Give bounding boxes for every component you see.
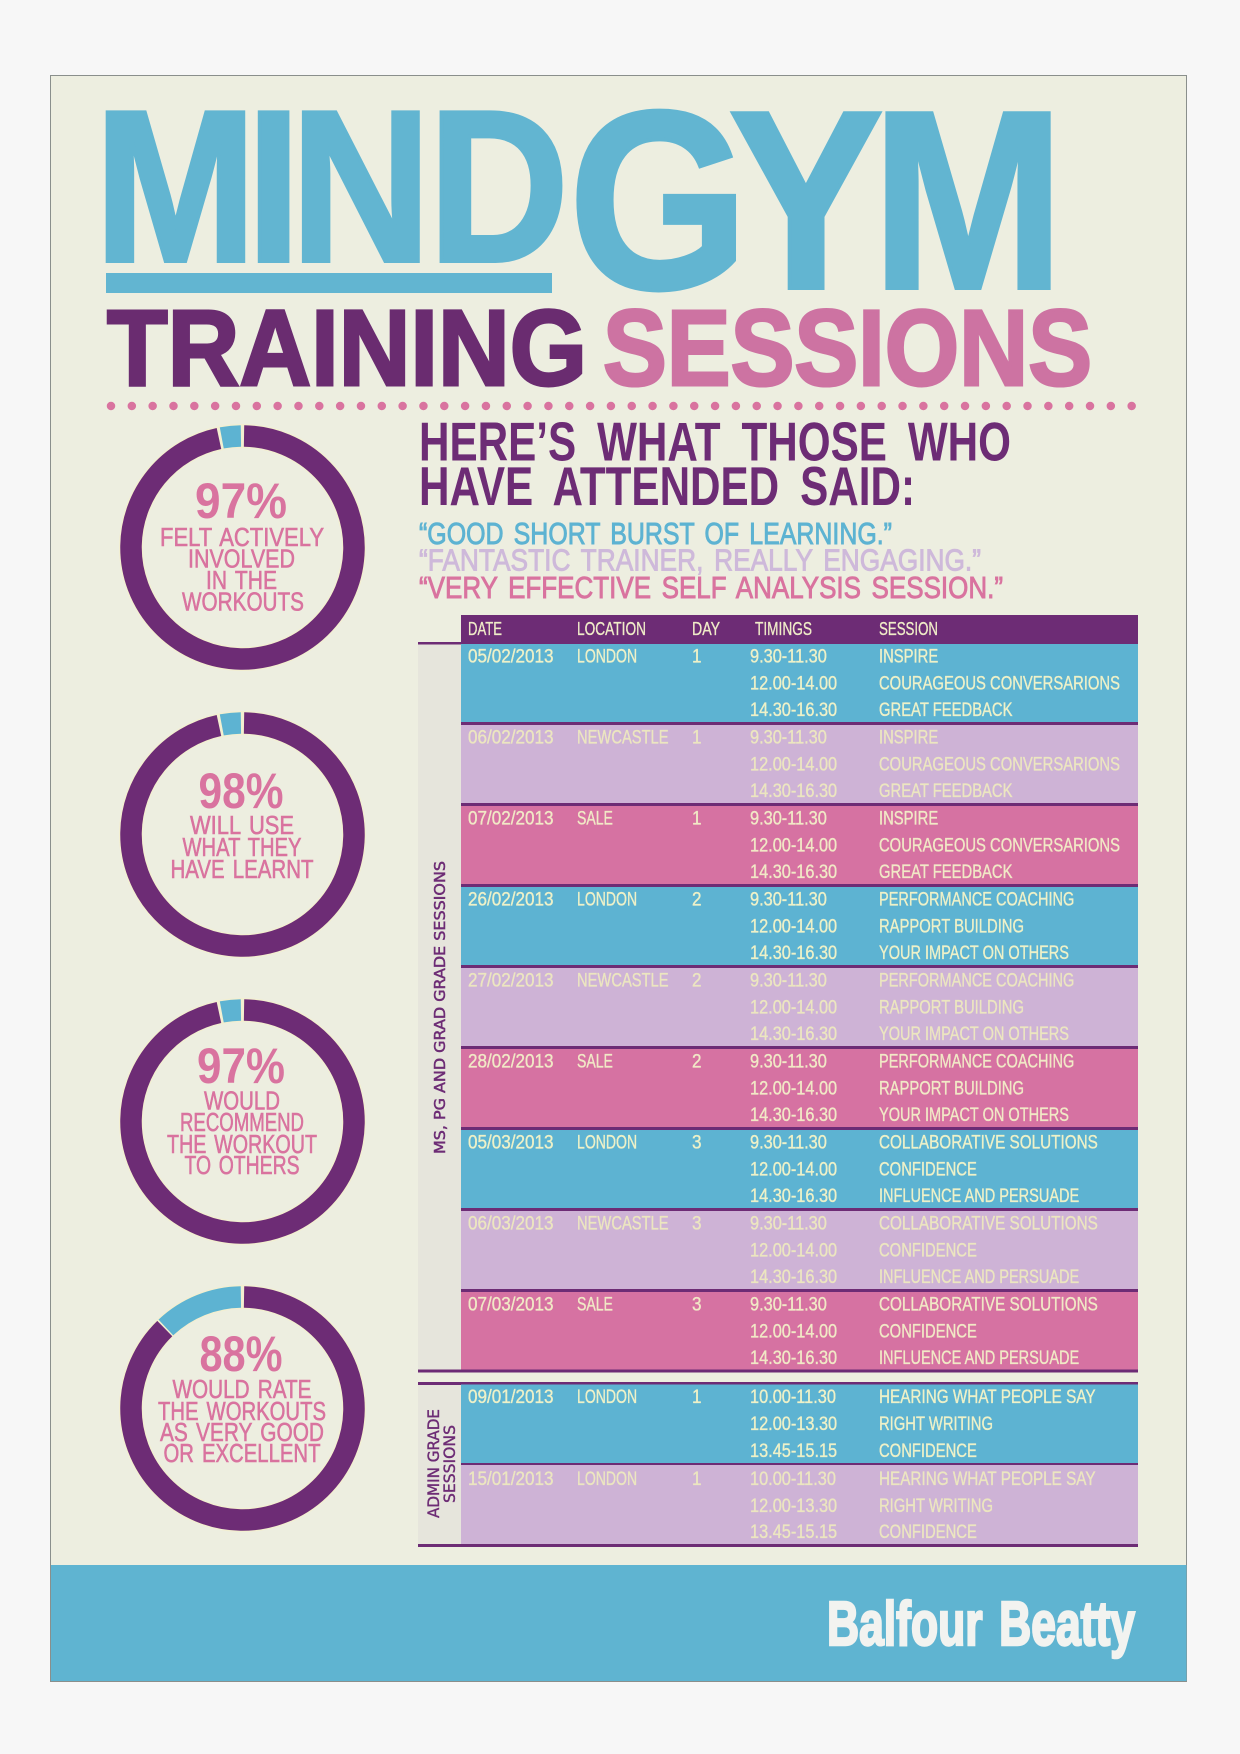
row: 27/02/2013 Newcastle: 2 bbox=[692, 970, 702, 991]
row: 05/02/2013 London: 1 bbox=[692, 646, 702, 667]
row: 09/01/2013 London: 13.45-15.15 bbox=[750, 1440, 837, 1461]
row: 28/02/2013 Sale: 12.00-14.00 bbox=[750, 1077, 837, 1099]
row: 06/03/2013 Newcastle: 3 bbox=[692, 1213, 702, 1234]
row: 06/02/2013 Newcastle: 06/02/2013 bbox=[468, 727, 554, 748]
row: 15/01/2013 London: 12.00-13.30 bbox=[750, 1495, 837, 1516]
donut: 97% felt actively involved: FELT ACTIVELY bbox=[160, 522, 324, 552]
side strip: MS, PG and Grad grade sessions: MS, PG AND GRAD GRADE SESSIONS bbox=[431, 861, 449, 1154]
row: 15/01/2013 London bbox=[461, 1465, 1138, 1544]
row: 28/02/2013 Sale: PERFORMANCE COACHING bbox=[879, 1051, 1074, 1072]
row: 07/02/2013 Sale bbox=[461, 806, 1138, 886]
donut: 98% will use what they have learnt bbox=[113, 705, 372, 964]
row: 06/03/2013 Newcastle bbox=[461, 1211, 1138, 1290]
quotes: “GOOD SHORT BURST OF LEARNING.” bbox=[419, 516, 892, 551]
donut: 88% would rate very good or excellent: AS VERY GOOD bbox=[160, 1417, 324, 1447]
title: MINDGYM bbox=[95, 59, 1064, 342]
row: 26/02/2013 London: LONDON bbox=[577, 888, 637, 910]
table header: TIMINGS bbox=[755, 619, 812, 639]
donut: 98% will use what they have learnt: WHAT THEY bbox=[182, 832, 302, 862]
donut: 98% will use what they have learnt: HAVE LEARNT bbox=[170, 854, 314, 884]
admin section start rule bbox=[418, 1382, 1138, 1385]
row: 26/02/2013 London: PERFORMANCE COACHING bbox=[879, 889, 1074, 910]
row: 07/02/2013 Sale: 14.30-16.30 bbox=[750, 861, 837, 882]
row: 06/03/2013 Newcastle: COLLABORATIVE SOLUTIONS bbox=[879, 1212, 1098, 1234]
row: 26/02/2013 London: 26/02/2013 bbox=[468, 889, 554, 910]
row: 05/03/2013 London: 05/03/2013 bbox=[468, 1132, 554, 1153]
row: 05/02/2013 London: COURAGEOUS CONVERSARIONS bbox=[879, 673, 1120, 694]
row: 27/02/2013 Newcastle: YOUR IMPACT ON OTHERS bbox=[879, 1023, 1069, 1044]
row: 07/02/2013 Sale: SALE bbox=[577, 807, 613, 829]
heading: attendees said bbox=[419, 410, 1011, 517]
row: 06/02/2013 Newcastle: 9.30-11.30 bbox=[750, 726, 827, 748]
row: 06/02/2013 Newcastle: 12.00-14.00 bbox=[750, 753, 837, 775]
row: 07/02/2013 Sale: 9.30-11.30 bbox=[750, 807, 827, 829]
donut: 97% would recommend bbox=[113, 992, 372, 1251]
row: 15/01/2013 London: LONDON bbox=[577, 1468, 637, 1490]
row: 26/02/2013 London: YOUR IMPACT ON OTHERS bbox=[879, 942, 1069, 963]
heading: attendees said: HAVE ATTENDED SAID: bbox=[419, 455, 915, 517]
subtitle: TRAINING: TRAINING bbox=[107, 287, 587, 408]
row: 05/03/2013 London: CONFIDENCE bbox=[879, 1159, 977, 1180]
side strip: admin grade sessions bbox=[418, 1384, 461, 1545]
table section end rule bbox=[418, 1370, 1138, 1372]
row: 09/01/2013 London: 10.00-11.30 bbox=[750, 1386, 836, 1407]
row: 05/02/2013 London: 05/02/2013 bbox=[468, 646, 554, 667]
row: 06/03/2013 Newcastle: 14.30-16.30 bbox=[750, 1266, 837, 1287]
donut: 97% would recommend: 97% bbox=[197, 1038, 285, 1094]
table bottom rule bbox=[418, 1544, 1138, 1547]
quotes: “VERY EFFECTIVE SELF ANALYSIS SESSION.” bbox=[419, 570, 1003, 605]
row: 07/03/2013 Sale: INFLUENCE AND PERSUADE bbox=[879, 1347, 1079, 1368]
row: 09/01/2013 London: RIGHT WRITING bbox=[879, 1413, 993, 1434]
row: 07/03/2013 Sale: CONFIDENCE bbox=[879, 1321, 977, 1342]
row: 07/03/2013 Sale: 14.30-16.30 bbox=[750, 1347, 837, 1368]
donut: 88% would rate very good or excellent bbox=[85, 1251, 400, 1566]
row: 05/02/2013 London: 14.30-16.30 bbox=[750, 699, 837, 720]
side strip: MS, PG and Grad grade sessions bbox=[418, 642, 461, 1370]
side strip: admin grade sessions: SESSIONS bbox=[440, 1425, 459, 1503]
heading: attendees said: HERE’S WHAT THOSE WHO bbox=[419, 410, 1011, 472]
row: 09/01/2013 London bbox=[461, 1384, 1138, 1464]
row: 06/02/2013 Newcastle: INSPIRE bbox=[879, 727, 938, 748]
donut: 97% would recommend: THE WORKOUT bbox=[167, 1129, 317, 1159]
donut: 97% would recommend: RECOMMEND bbox=[180, 1107, 304, 1137]
row: 15/01/2013 London: RIGHT WRITING bbox=[879, 1495, 993, 1516]
row: 27/02/2013 Newcastle bbox=[461, 968, 1138, 1048]
row: 15/01/2013 London: 15/01/2013 bbox=[468, 1468, 554, 1489]
donut: 97% felt actively involved: INVOLVED bbox=[188, 544, 295, 574]
row: 28/02/2013 Sale: 14.30-16.30 bbox=[750, 1104, 837, 1125]
row: 28/02/2013 Sale: YOUR IMPACT ON OTHERS bbox=[879, 1104, 1069, 1125]
row: 06/02/2013 Newcastle: COURAGEOUS CONVERSARIONS bbox=[879, 754, 1120, 775]
table header: LOCATION bbox=[577, 619, 646, 639]
row: 09/01/2013 London: 12.00-13.30 bbox=[750, 1413, 837, 1434]
table header bbox=[461, 615, 1138, 644]
row: 05/02/2013 London: GREAT FEEDBACK bbox=[879, 699, 1013, 720]
table header: DAY bbox=[692, 619, 720, 639]
table header: DATE bbox=[468, 619, 502, 639]
row: 07/02/2013 Sale: GREAT FEEDBACK bbox=[879, 861, 1013, 882]
title: MINDGYM: GYM bbox=[569, 59, 1064, 342]
row: 05/03/2013 London: 12.00-14.00 bbox=[750, 1158, 837, 1180]
row: 07/03/2013 Sale: SALE bbox=[577, 1293, 613, 1315]
row: 26/02/2013 London bbox=[461, 887, 1138, 966]
donut: 97% would recommend: WOULD bbox=[204, 1086, 280, 1116]
row: 09/01/2013 London: HEARING WHAT PEOPLE SAY bbox=[879, 1385, 1096, 1407]
row: 05/02/2013 London bbox=[461, 644, 1138, 724]
row: 06/02/2013 Newcastle: NEWCASTLE bbox=[577, 727, 669, 748]
row: 06/03/2013 Newcastle: 12.00-14.00 bbox=[750, 1239, 837, 1261]
row: 05/03/2013 London: COLLABORATIVE SOLUTIONS bbox=[879, 1131, 1098, 1153]
row: 06/03/2013 Newcastle: NEWCASTLE bbox=[577, 1213, 669, 1234]
row: 15/01/2013 London: HEARING WHAT PEOPLE SAY bbox=[879, 1467, 1096, 1489]
donut: 88% would rate very good or excellent: THE WORKOUTS bbox=[158, 1396, 326, 1426]
row: 28/02/2013 Sale: RAPPORT BUILDING bbox=[879, 1078, 1024, 1099]
row: 07/02/2013 Sale: 12.00-14.00 bbox=[750, 834, 837, 856]
donut: 97% felt actively involved: IN THE bbox=[206, 565, 277, 595]
donut: 98% will use what they have learnt: WILL USE bbox=[190, 810, 294, 840]
row: 27/02/2013 Newcastle: 14.30-16.30 bbox=[750, 1023, 837, 1044]
donut: 88% would rate very good or excellent: OR EXCELLENT bbox=[164, 1438, 321, 1468]
donut: 97% felt actively involved: 97% bbox=[195, 473, 287, 529]
donut: 97% felt actively involved: WORKOUTS bbox=[182, 587, 304, 617]
row: 05/02/2013 London: LONDON bbox=[577, 645, 637, 667]
row: 28/02/2013 Sale bbox=[461, 1049, 1138, 1128]
row: 07/02/2013 Sale: COURAGEOUS CONVERSARIONS bbox=[879, 835, 1120, 856]
row: 27/02/2013 Newcastle: 27/02/2013 bbox=[468, 970, 554, 991]
row: 27/02/2013 Newcastle: 12.00-14.00 bbox=[750, 996, 837, 1018]
row: 05/03/2013 London bbox=[461, 1130, 1138, 1210]
row: 09/01/2013 London: 1 bbox=[692, 1386, 702, 1407]
row: 26/02/2013 London: 14.30-16.30 bbox=[750, 942, 837, 963]
row: 27/02/2013 Newcastle: 9.30-11.30 bbox=[750, 969, 827, 991]
donut: 97% felt actively involved bbox=[113, 418, 372, 677]
row: 05/03/2013 London: INFLUENCE AND PERSUADE bbox=[879, 1185, 1079, 1206]
row: 05/02/2013 London: 12.00-14.00 bbox=[750, 672, 837, 694]
footer band bbox=[51, 1565, 1186, 1681]
row: 27/02/2013 Newcastle: RAPPORT BUILDING bbox=[879, 997, 1024, 1018]
donut: 98% will use what they have learnt: 98% bbox=[198, 763, 284, 819]
row: 28/02/2013 Sale: 2 bbox=[692, 1051, 702, 1072]
row: 05/03/2013 London: 9.30-11.30 bbox=[750, 1131, 827, 1153]
row: 06/03/2013 Newcastle: INFLUENCE AND PERSUADE bbox=[879, 1266, 1079, 1287]
row: 26/02/2013 London: 9.30-11.30 bbox=[750, 888, 827, 910]
row: 09/01/2013 London: CONFIDENCE bbox=[879, 1440, 977, 1461]
row: 07/03/2013 Sale: 3 bbox=[692, 1294, 702, 1315]
subtitle: SESSIONS: SESSIONS bbox=[603, 287, 1092, 408]
row: 15/01/2013 London: 13.45-15.15 bbox=[750, 1521, 837, 1542]
row: 07/03/2013 Sale bbox=[461, 1292, 1138, 1370]
row: 28/02/2013 Sale: SALE bbox=[577, 1050, 613, 1072]
row: 27/02/2013 Newcastle: PERFORMANCE COACHING bbox=[879, 970, 1074, 991]
row: 06/02/2013 Newcastle: GREAT FEEDBACK bbox=[879, 780, 1013, 801]
row: 05/02/2013 London: 9.30-11.30 bbox=[750, 645, 827, 667]
row: 05/02/2013 London: INSPIRE bbox=[879, 646, 938, 667]
row: 06/03/2013 Newcastle: CONFIDENCE bbox=[879, 1240, 977, 1261]
row: 09/01/2013 London: LONDON bbox=[577, 1386, 637, 1408]
quotes bbox=[419, 516, 1003, 605]
row: 26/02/2013 London: 12.00-14.00 bbox=[750, 915, 837, 937]
title: MINDGYM: MIND bbox=[95, 65, 569, 307]
donut: 97% would recommend: TO OTHERS bbox=[184, 1150, 300, 1180]
row: 26/02/2013 London: RAPPORT BUILDING bbox=[879, 916, 1024, 937]
row: 07/03/2013 Sale: 9.30-11.30 bbox=[750, 1293, 827, 1315]
row: 07/02/2013 Sale: 07/02/2013 bbox=[468, 808, 554, 829]
row: 28/02/2013 Sale: 9.30-11.30 bbox=[750, 1050, 827, 1072]
row: 06/02/2013 Newcastle: 1 bbox=[692, 727, 702, 748]
row: 06/02/2013 Newcastle: 14.30-16.30 bbox=[750, 780, 837, 801]
row: 15/01/2013 London: 1 bbox=[692, 1468, 702, 1489]
quotes: “FANTASTIC TRAINER, REALLY ENGAGING.” bbox=[419, 542, 981, 578]
row: 27/02/2013 Newcastle: NEWCASTLE bbox=[577, 970, 669, 991]
donut: 88% would rate very good or excellent: 88% bbox=[200, 1326, 282, 1382]
row: 15/01/2013 London: 10.00-11.30 bbox=[750, 1468, 836, 1489]
table header: SESSION bbox=[879, 619, 938, 639]
row: 05/03/2013 London: LONDON bbox=[577, 1131, 637, 1153]
side strip: admin grade sessions: ADMIN GRADE bbox=[424, 1409, 443, 1518]
row: 15/01/2013 London: CONFIDENCE bbox=[879, 1521, 977, 1542]
title underline bbox=[106, 273, 552, 293]
dotted divider bbox=[111, 402, 1134, 410]
row: 07/03/2013 Sale: 07/03/2013 bbox=[468, 1294, 554, 1315]
row: 09/01/2013 London: 09/01/2013 bbox=[468, 1386, 554, 1407]
row: 07/02/2013 Sale: 1 bbox=[692, 808, 702, 829]
row: 07/03/2013 Sale: 12.00-14.00 bbox=[750, 1320, 837, 1342]
row: 07/03/2013 Sale: COLLABORATIVE SOLUTIONS bbox=[879, 1293, 1098, 1315]
donut: 88% would rate very good or excellent: WOULD RATE bbox=[172, 1374, 312, 1404]
row: 26/02/2013 London: 2 bbox=[692, 889, 702, 910]
row: 06/03/2013 Newcastle: 9.30-11.30 bbox=[750, 1212, 827, 1234]
row: 07/02/2013 Sale: INSPIRE bbox=[879, 808, 938, 829]
row: 05/03/2013 London: 3 bbox=[692, 1132, 702, 1153]
row: 28/02/2013 Sale: 28/02/2013 bbox=[468, 1051, 554, 1072]
row: 06/02/2013 Newcastle bbox=[461, 725, 1138, 804]
row: 05/03/2013 London: 14.30-16.30 bbox=[750, 1185, 837, 1206]
row: 06/03/2013 Newcastle: 06/03/2013 bbox=[468, 1213, 554, 1234]
